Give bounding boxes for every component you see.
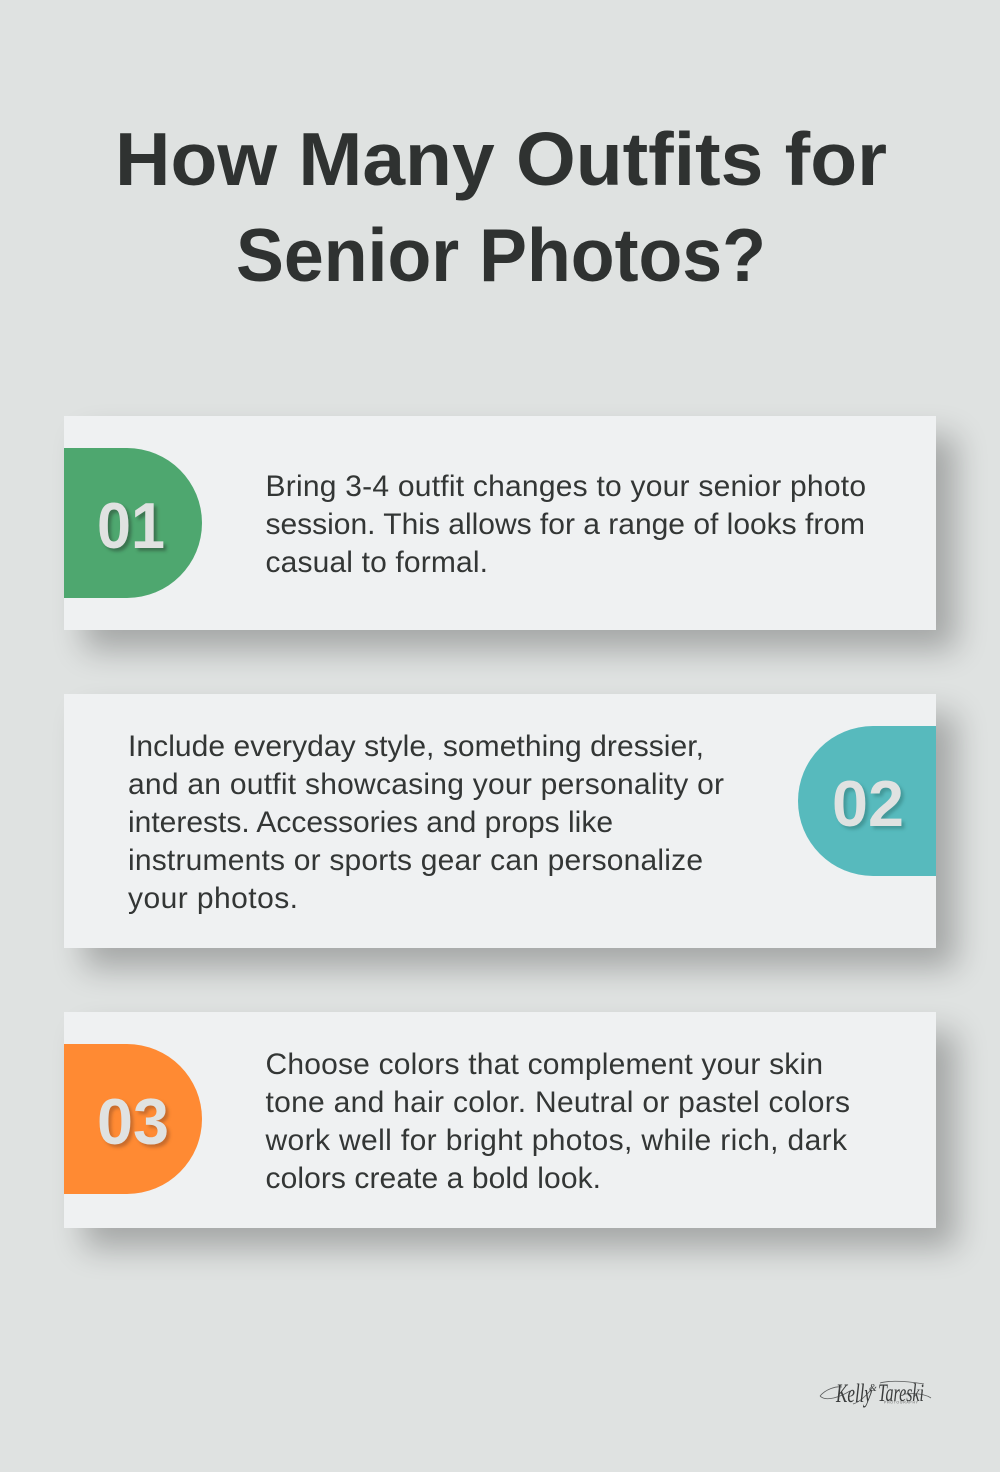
logo: signature: PHOTOGRAPHY (884, 1400, 919, 1404)
title: Senior Photos? (236, 213, 766, 297)
logo: signature (820, 1379, 931, 1408)
step 3 text: work well for bright photos, while rich, dark (264, 1124, 848, 1157)
step 3 text (264, 1048, 850, 1195)
step 2 text: Include everyday style, something dressier, (128, 730, 704, 763)
step 2 badge: 02 (835, 770, 907, 843)
step 2 text: your photos. (128, 882, 298, 915)
title (115, 117, 887, 297)
logo: signature: Tareski (878, 1380, 924, 1407)
step 3 text: tone and hair color. Neutral or pastel colors (266, 1086, 850, 1119)
step 2 text: and an outfit showcasing your personality or (128, 768, 724, 801)
step 2 text (128, 730, 724, 915)
step 2 badge (798, 726, 936, 876)
logo: signature: & (869, 1383, 877, 1394)
step 1 badge: 01 (100, 492, 168, 565)
logo: signature: Kelly (835, 1379, 872, 1408)
panel: step 1 (64, 416, 956, 650)
step 3 text: colors create a bold look. (266, 1162, 601, 1195)
step 1 text: session. This allows for a range of looks from (266, 508, 865, 541)
panel: step 3 (64, 1012, 956, 1248)
step 3 badge: 03 (100, 1088, 172, 1161)
title: How Many Outfits for (115, 117, 887, 201)
panel: step 2 (64, 694, 956, 968)
step 1 text (266, 470, 866, 579)
step 3 badge (64, 1044, 202, 1194)
step 1 text: casual to formal. (266, 546, 488, 579)
step 1 badge (64, 448, 202, 598)
step 3 badge: 03 (97, 1085, 169, 1158)
step 2 text: interests. Accessories and props like (128, 806, 613, 839)
step 1 text: Bring 3-4 outfit changes to your senior photo (266, 470, 866, 503)
step 3 text: Choose colors that complement your skin (266, 1048, 823, 1081)
step 2 text: instruments or sports gear can personalize (128, 844, 703, 877)
step 1 badge: 01 (97, 489, 165, 562)
step 2 badge: 02 (832, 767, 904, 840)
